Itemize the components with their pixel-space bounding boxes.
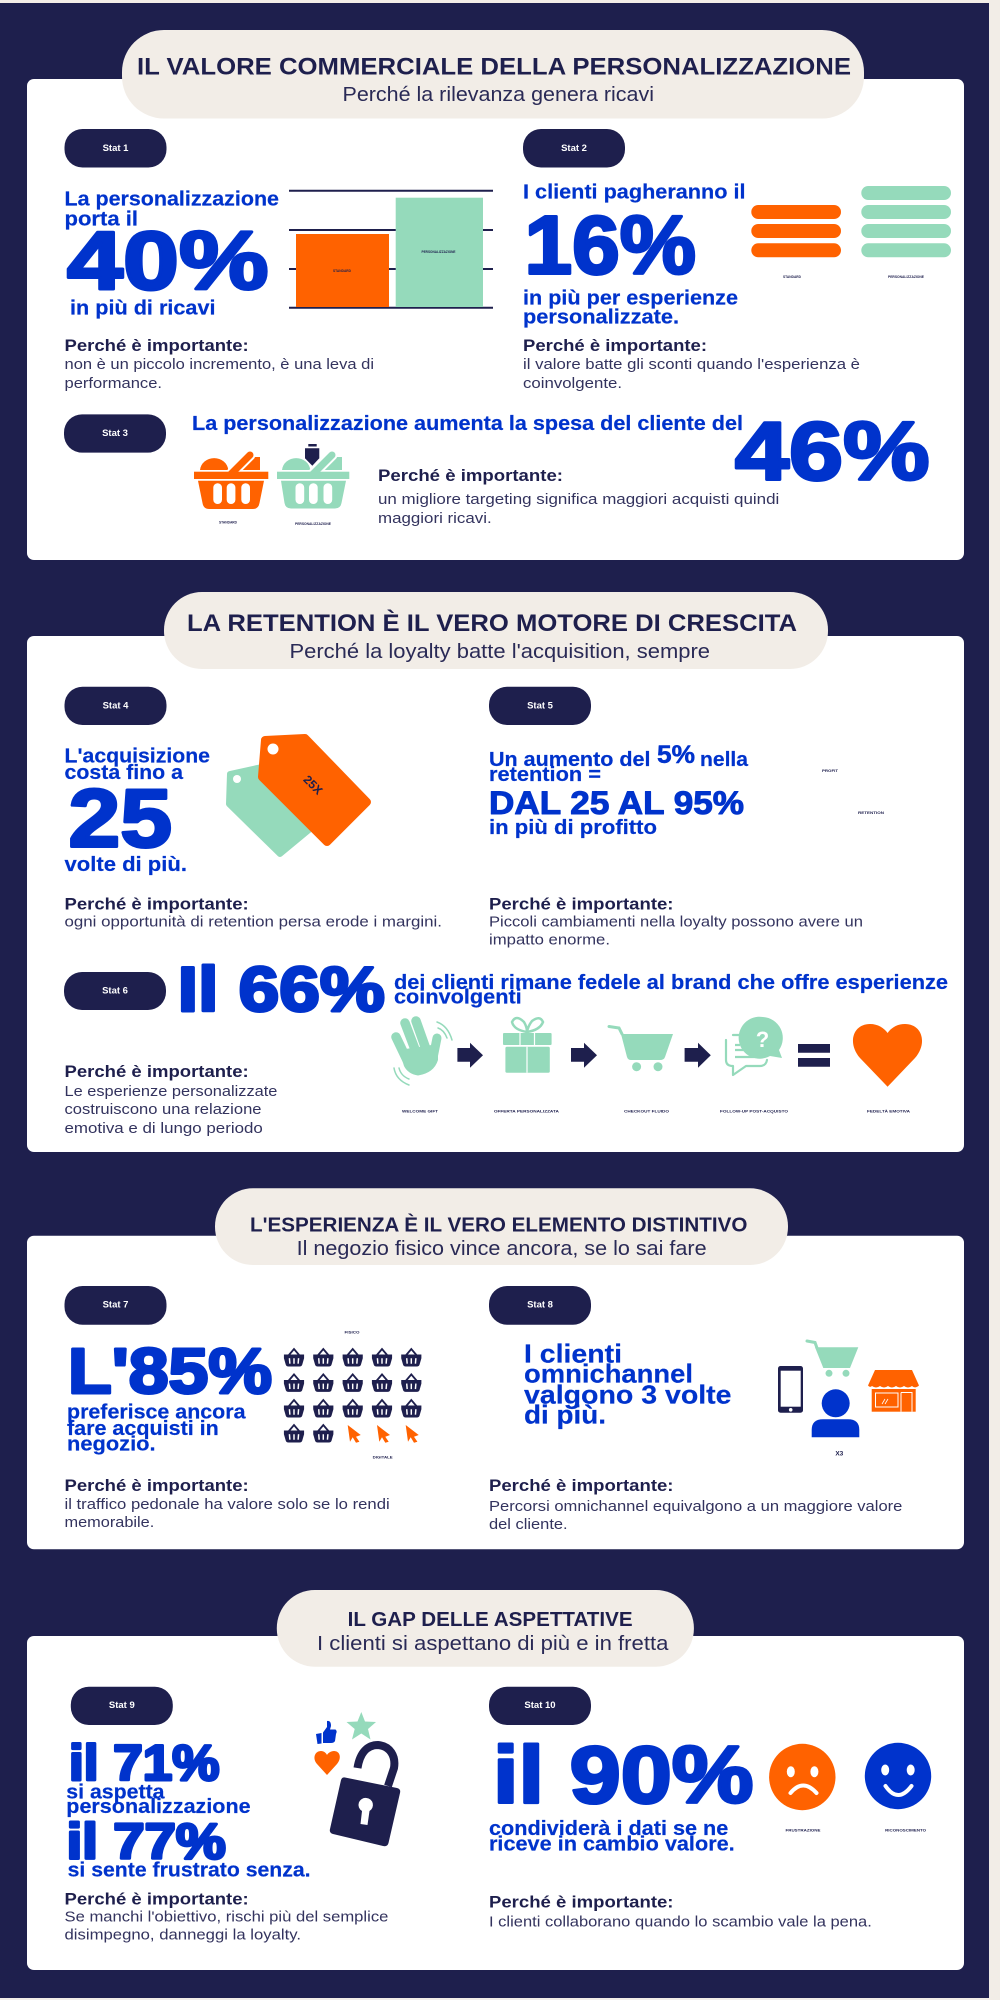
stat 3 why it matters xyxy=(378,467,779,527)
stat 9 why it matters: Perché è importante: xyxy=(64,1890,249,1908)
stat 2 why it matters: Perché è importante: xyxy=(523,337,707,355)
stat 4 badge: Stat 4 xyxy=(103,700,129,712)
heading pill 1: IL VALORE COMMERCIALE DELLA PERSONALIZZAZIONE xyxy=(137,54,851,80)
icon: heart, fedeltà emotiva xyxy=(853,1024,922,1114)
stat 4 why it matters: Perché è importante: xyxy=(64,896,249,914)
panel card 4 xyxy=(27,1636,964,1970)
icon: chat bubbles, follow-up post-acquisto: ? xyxy=(756,1027,769,1052)
panel card 2 xyxy=(27,636,964,1152)
stat 3 number: 46% xyxy=(735,404,930,498)
icon: stacked bars standard vs personalizzazione xyxy=(751,186,951,279)
heading pill 3 xyxy=(215,1188,788,1265)
stat 9 why it matters xyxy=(64,1890,388,1944)
stat 2 badge: Stat 2 xyxy=(561,143,587,154)
stat 7 why it matters: memorabile. xyxy=(64,1515,154,1531)
stat 5 badge: Stat 5 xyxy=(527,700,554,712)
stat 10 headline: riceve in cambio valore. xyxy=(489,1833,735,1856)
stat 2 why it matters xyxy=(523,337,860,392)
stat 4 headline: 25 xyxy=(68,772,172,864)
icon: mint basket with pin xyxy=(277,444,349,526)
stat 1 why it matters: Perché è importante: xyxy=(64,337,249,355)
stat 8 badge xyxy=(489,1286,591,1325)
stat 2 headline: I clienti pagheranno il xyxy=(523,180,746,204)
icon: heart, fedeltà emotiva: FEDELTÀ EMOTIVA xyxy=(867,1108,911,1114)
heading pill 1 xyxy=(122,30,864,118)
icon: chat bubbles, follow-up post-acquisto xyxy=(720,1017,788,1114)
icon: mint basket with pin: PERSONALIZZAZIONE xyxy=(295,522,332,526)
icon: waving hand, welcome gift xyxy=(394,1021,452,1114)
stat 7 badge xyxy=(64,1286,166,1325)
icon: sad face, frustrazione xyxy=(769,1744,836,1832)
stat 5 headline: nella xyxy=(700,748,749,771)
heading pill 2 xyxy=(164,592,828,669)
icon: orange basket xyxy=(194,455,268,524)
stat 5 why it matters: impatto enorme. xyxy=(489,933,610,949)
stat 8 why it matters: Percorsi omnichannel equivalgono a un maggiore valore xyxy=(489,1499,902,1515)
icon: cart, checkout fluido xyxy=(609,1026,673,1114)
icon: happy face, riconoscimento: RICONOSCIMENTO xyxy=(885,1828,926,1832)
stat 6 badge: Stat 6 xyxy=(102,986,128,997)
stat 1 why it matters: non è un piccolo incremento, è una leva di xyxy=(64,357,374,373)
stat 7 headline: negozio. xyxy=(67,1433,156,1456)
stat 1 headline xyxy=(64,187,279,319)
stat 1 headline: in più di ricavi xyxy=(70,296,216,319)
stat 9 headline: il 71% xyxy=(69,1735,220,1791)
stat 6 why it matters: costruiscono una relazione xyxy=(64,1102,262,1118)
stat 8 why it matters: Perché è importante: xyxy=(489,1477,674,1495)
stat 10 why it matters: Perché è importante: xyxy=(489,1894,674,1912)
stat 5 headline xyxy=(489,741,749,839)
stat 3 why it matters: un migliore targeting significa maggiori acquisti quindi xyxy=(378,492,779,508)
stat 6 headline: coinvolgenti xyxy=(394,986,522,1009)
stat 5 headline: Un aumento del xyxy=(489,748,650,771)
icon: sad face, frustrazione: FRUSTRAZIONE xyxy=(786,1828,821,1832)
bar chart: standard vs personalizzazione: PERSONALIZZAZIONE xyxy=(422,250,456,254)
stat 5 why it matters xyxy=(489,896,863,949)
stat 8 headline: I clienti xyxy=(524,1339,622,1369)
stat 2 headline: in più per esperienze xyxy=(523,287,738,310)
stat 5 headline: DAL 25 AL 95% xyxy=(489,785,744,821)
stat 1 badge xyxy=(64,129,166,168)
stat 8 headline: omnichannel xyxy=(524,1359,693,1389)
stat 2 headline: personalizzate. xyxy=(523,306,679,328)
arrow 2 xyxy=(571,1043,597,1068)
stat 4 headline xyxy=(64,744,210,876)
stat 5 headline: retention = xyxy=(489,763,601,786)
section 1: il valore commerciale xyxy=(27,30,964,560)
stat 8 why it matters: del cliente. xyxy=(489,1517,568,1533)
stat 7 headline: preferisce ancora xyxy=(67,1400,246,1423)
icon: price tags 25X xyxy=(229,738,367,854)
stat 7 headline: fare acquisti in xyxy=(67,1417,219,1440)
icon: gift, offerta personalizzata xyxy=(494,1018,560,1114)
icon: orange basket: STANDARD xyxy=(219,520,237,524)
stat 6 why it matters xyxy=(64,1063,277,1137)
section 4: il gap delle aspettative xyxy=(27,1590,964,1970)
stat 9 headline xyxy=(66,1735,311,1882)
stat 1 headline: La personalizzazione xyxy=(64,187,279,210)
stat 9 headline: il 77% xyxy=(67,1813,226,1869)
stat 6 badge xyxy=(64,972,166,1010)
stat 5 headline: 5% xyxy=(657,741,695,769)
heading pill 2: LA RETENTION È IL VERO MOTORE DI CRESCITA xyxy=(187,609,797,637)
icon: chat bubbles, follow-up post-acquisto: FOLLOW-UP POST-ACQUISTO xyxy=(720,1110,788,1114)
icon: stacked bars standard vs personalizzazione: PERSONALIZZAZIONE xyxy=(888,275,925,279)
stat 9 badge xyxy=(71,1687,173,1725)
stat 6 number: Il 66% xyxy=(178,955,385,1025)
bar chart: standard vs personalizzazione xyxy=(289,191,493,308)
heading pill 3: L'ESPERIENZA È IL VERO ELEMENTO DISTINTIVO xyxy=(250,1213,747,1236)
arrow 3 xyxy=(685,1043,711,1068)
stat 4 headline: costa fino a xyxy=(64,761,184,784)
stat 4 why it matters: ogni opportunità di retention persa erode i margini. xyxy=(64,915,442,931)
stat 6 why it matters: Perché è importante: xyxy=(64,1063,249,1081)
panel card 1 xyxy=(27,79,964,560)
stat 4 headline: volte di più. xyxy=(64,853,187,876)
stat 3 why it matters: Perché è importante: xyxy=(378,467,563,485)
stat 3 badge: Stat 3 xyxy=(102,428,128,439)
stat 8 why it matters xyxy=(489,1477,902,1533)
heading pill 4 xyxy=(277,1590,694,1667)
stat 5 headline: in più di profitto xyxy=(489,816,657,839)
stat 9 headline: si aspetta xyxy=(66,1780,165,1803)
icon grid: physical baskets and digital cursors xyxy=(284,1330,421,1460)
heading pill 1: Perché la rilevanza genera ricavi xyxy=(342,84,654,106)
bar chart: standard vs personalizzazione: STANDARD xyxy=(333,269,351,273)
icon: omnichannel customer with phone, cart and shop xyxy=(778,1341,919,1458)
stat 2 why it matters: coinvolgente. xyxy=(523,376,622,392)
stat 5 badge xyxy=(489,687,591,725)
icon: open lock with star, thumb and heart xyxy=(314,1712,400,1846)
icon: omnichannel customer with phone, cart and shop: X3 xyxy=(835,1450,844,1458)
stat 10 why it matters xyxy=(489,1894,872,1931)
stat 9 headline: si sente frustrato senza. xyxy=(68,1859,311,1882)
icon grid: physical baskets and digital cursors: DIGITALE xyxy=(373,1456,394,1460)
stat 7 headline xyxy=(67,1335,272,1456)
stat 1 headline: porta il xyxy=(64,207,138,230)
stat 3 badge xyxy=(64,414,166,453)
stat 7 why it matters: Perché è importante: xyxy=(64,1477,249,1495)
stat 8 headline xyxy=(524,1339,732,1429)
stat 10 headline: il 90% xyxy=(493,1731,754,1821)
chart labels: profit and retention xyxy=(822,769,885,815)
stat 9 why it matters: Se manchi l'obiettivo, rischi più del semplice xyxy=(64,1910,388,1926)
stat 10 why it matters: I clienti collaborano quando lo scambio vale la pena. xyxy=(489,1915,872,1931)
stat 8 badge: Stat 8 xyxy=(527,1300,553,1311)
stat 3 why it matters: maggiori ricavi. xyxy=(378,511,492,527)
stat 4 badge xyxy=(64,687,166,725)
stat 8 headline: di più. xyxy=(524,1399,606,1429)
icon: cart, checkout fluido: CHECKOUT FLUIDO xyxy=(624,1110,669,1114)
stat 3 headline: La personalizzazione aumenta la spesa del cliente del xyxy=(192,412,743,435)
stat 4 headline: L'acquisizione xyxy=(64,744,210,768)
icon: waving hand, welcome gift: WELCOME GIFT xyxy=(402,1110,439,1114)
stat 10 badge xyxy=(489,1687,591,1725)
section 3: l'esperienza xyxy=(27,1188,964,1549)
stat 7 why it matters: il traffico pedonale ha valore solo se lo rendi xyxy=(64,1497,390,1513)
heading pill 4: I clienti si aspettano di più e in fretta xyxy=(317,1633,669,1655)
chart labels: profit and retention: RETENTION xyxy=(858,811,885,815)
stat 6 why it matters: emotiva e di lungo periodo xyxy=(64,1121,263,1137)
icon grid: physical baskets and digital cursors: FISICO xyxy=(344,1330,360,1334)
icon: equals sign xyxy=(798,1044,830,1067)
stat 6 why it matters: Le esperienze personalizzate xyxy=(64,1084,277,1100)
stat 6 headline: dei clienti rimane fedele al brand che offre esperienze xyxy=(394,971,948,994)
stat 9 why it matters: disimpegno, danneggi la loyalty. xyxy=(64,1928,301,1944)
stat 6 headline xyxy=(394,971,948,1009)
icon: price tags 25X: 25X xyxy=(300,772,326,798)
icon: stacked bars standard vs personalizzazione: STANDARD xyxy=(783,275,801,279)
stat 5 why it matters: Perché è importante: xyxy=(489,896,674,914)
stat 9 headline: personalizzazione xyxy=(66,1795,251,1818)
stat 2 badge xyxy=(523,129,625,168)
heading pill 3: Il negozio fisico vince ancora, se lo sai fare xyxy=(297,1238,707,1260)
stat 2 headline xyxy=(523,180,746,328)
heading pill 2: Perché la loyalty batte l'acquisition, sempre xyxy=(290,641,710,663)
section 2: la retention xyxy=(27,592,964,1152)
icon: gift, offerta personalizzata: OFFERTA PERSONALIZZATA xyxy=(494,1110,560,1114)
arrow 1 xyxy=(457,1043,483,1068)
stat 2 headline: 16% xyxy=(524,198,696,292)
stat 1 badge: Stat 1 xyxy=(103,143,129,154)
icon: happy face, riconoscimento xyxy=(865,1743,931,1832)
stat 10 badge: Stat 10 xyxy=(524,1700,556,1711)
stat 10 headline xyxy=(489,1731,754,1856)
stat 7 why it matters xyxy=(64,1477,390,1531)
stat 1 headline: 40% xyxy=(67,214,268,307)
stat 7 headline: L'85% xyxy=(68,1335,272,1407)
stat 5 why it matters: Piccoli cambiamenti nella loyalty possono avere un xyxy=(489,915,863,931)
stat 2 why it matters: il valore batte gli sconti quando l'esperienza è xyxy=(523,357,860,373)
stat 10 headline: condividerà i dati se ne xyxy=(489,1817,728,1840)
stat 1 why it matters xyxy=(64,337,374,392)
stat 7 badge: Stat 7 xyxy=(103,1300,128,1311)
stat 9 badge: Stat 9 xyxy=(109,1700,135,1711)
stat 4 why it matters xyxy=(64,896,442,931)
stat 1 why it matters: performance. xyxy=(64,376,162,392)
heading pill 4: IL GAP DELLE ASPETTATIVE xyxy=(348,1608,633,1631)
stat 8 headline: valgono 3 volte xyxy=(524,1380,732,1410)
panel card 3 xyxy=(27,1236,964,1549)
chart labels: profit and retention: PROFIT xyxy=(822,769,839,773)
